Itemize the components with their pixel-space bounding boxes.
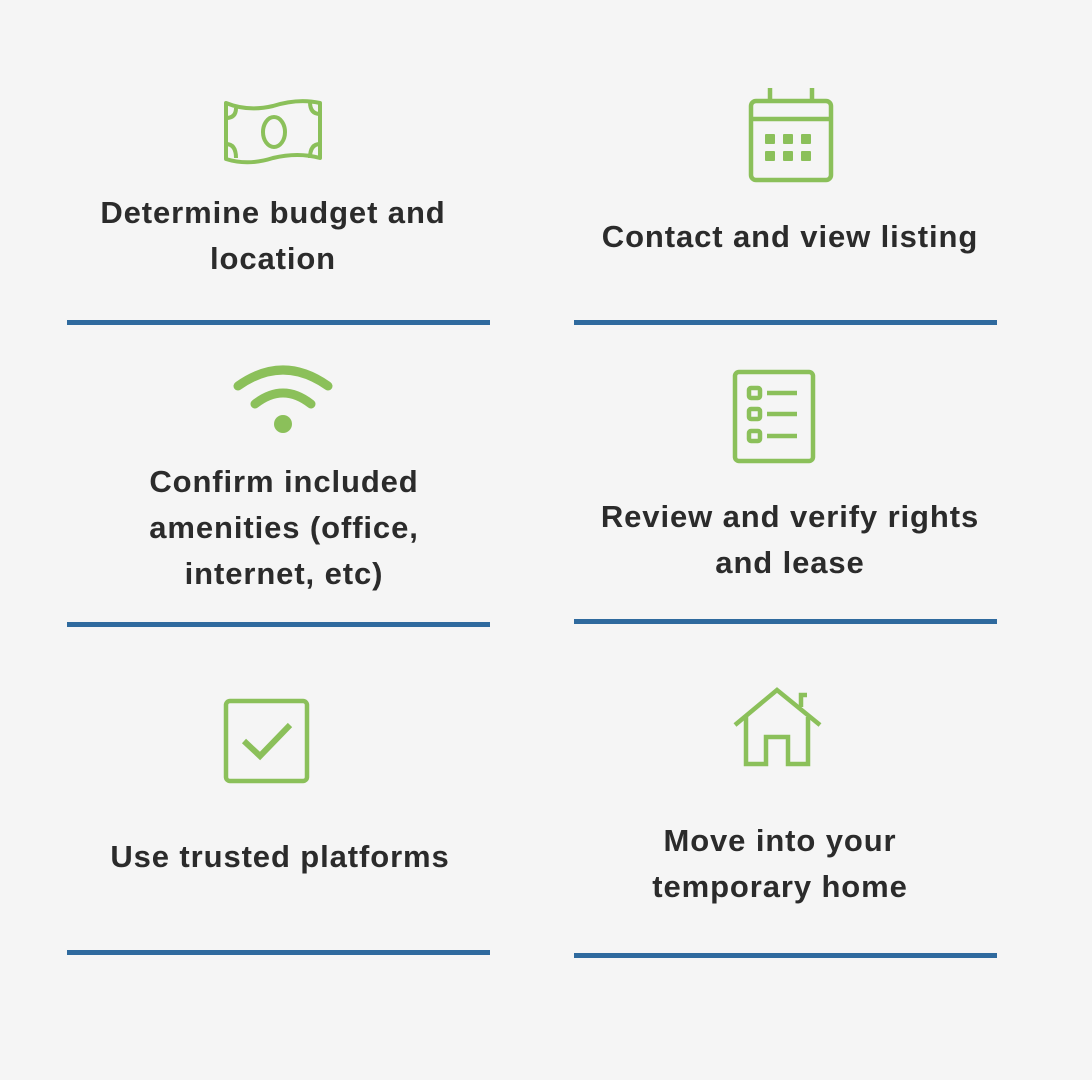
heading: amenities: internet, etc) [185, 556, 383, 591]
icon: checkbox [224, 698, 310, 784]
heading: trusted: Use trusted platforms [110, 839, 450, 874]
icon: list [732, 370, 816, 464]
heading: amenities: Confirm included [149, 464, 419, 499]
icon: house [734, 687, 822, 766]
icon: money [224, 99, 322, 164]
icon: wifi [234, 365, 332, 433]
heading: move in: Move into your [663, 823, 897, 858]
heading: determine budget: location [210, 241, 336, 276]
heading: review: and lease [715, 545, 865, 580]
heading: move in [652, 823, 908, 904]
heading: review [601, 499, 979, 580]
heading: determine budget: Determine budget and [100, 195, 446, 230]
heading: amenities [149, 464, 419, 591]
heading: move in: temporary home [652, 869, 908, 904]
icon: calendar [748, 88, 834, 182]
heading: determine budget [100, 195, 446, 276]
heading: amenities: amenities (office, [149, 510, 419, 545]
heading: contact: Contact and view listing [602, 219, 978, 254]
heading: review: Review and verify rights [601, 499, 979, 534]
